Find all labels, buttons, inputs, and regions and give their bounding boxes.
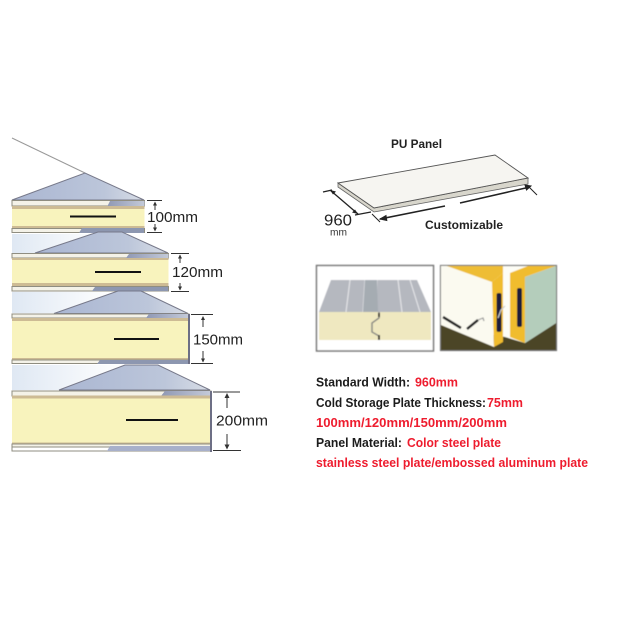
dimension: 100mm: 100mm — [147, 209, 198, 226]
dimension: 120mm: 120mm — [172, 264, 223, 281]
panel: thickness cross-sections — [12, 138, 268, 452]
line: standard width: 960mm — [415, 376, 458, 390]
photo: panel cam lock — [440, 266, 556, 350]
line: plate thickness: Cold Storage Plate Thickness: — [316, 396, 486, 410]
label: Customizable: Customizable — [425, 220, 503, 232]
dimension: 150mm — [191, 314, 243, 364]
photo: panel joint cross-section — [316, 266, 434, 351]
dimension: 100mm — [147, 200, 198, 232]
line: panel material: Color steel plate — [407, 436, 501, 450]
section: 100mm — [12, 138, 198, 233]
pale background behind sections — [12, 234, 122, 390]
width arrow — [323, 190, 371, 215]
label: 960 mm: mm — [330, 228, 347, 238]
heading: PU Panel: PU Panel — [391, 139, 442, 151]
length arrows — [372, 185, 537, 222]
dimension: 200mm: 200mm — [216, 412, 268, 430]
label: 960 mm — [324, 212, 352, 238]
line: material options: stainless steel plate/embossed aluminum plate — [316, 456, 588, 470]
dimension: 200mm — [213, 392, 268, 450]
line: plate thickness: 75mm — [487, 396, 523, 410]
section: 120mm — [12, 232, 223, 292]
board illustration — [338, 155, 528, 212]
dimension: 150mm: 150mm — [193, 332, 243, 348]
line: standard width — [316, 376, 458, 390]
line: panel material — [316, 436, 501, 450]
panel: PU panel diagram — [323, 139, 537, 238]
line: thickness options: 100mm/120mm/150mm/200mm — [316, 416, 507, 430]
section: 150mm — [12, 291, 243, 364]
dimension: 120mm — [171, 254, 223, 292]
section: 200mm — [12, 365, 268, 452]
specification text — [316, 376, 588, 470]
label: 960 mm: 960 — [324, 212, 352, 230]
line: panel material: Panel Material: — [316, 436, 402, 450]
line: standard width: Standard Width: — [316, 376, 410, 390]
